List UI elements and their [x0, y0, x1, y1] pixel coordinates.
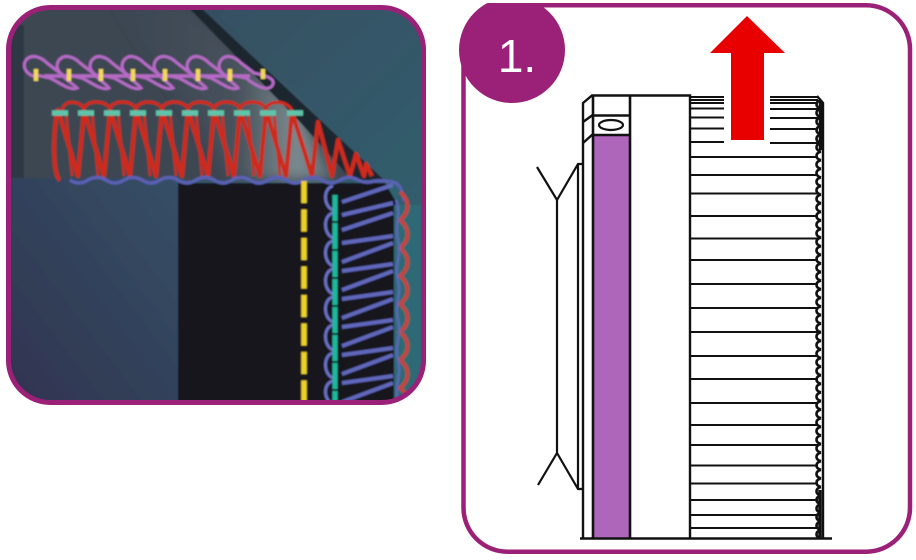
step number badge: 1.: [498, 30, 536, 82]
blue edge line: [396, 200, 399, 404]
red up arrow: [710, 16, 785, 140]
garment outline: [580, 96, 832, 538]
teal needle thread: [332, 195, 338, 404]
purple fabric strip: [593, 135, 630, 538]
panel: stitch close-up: [6, 5, 426, 406]
blue looper scallops: [70, 178, 404, 201]
blue diagonal stitches: [342, 185, 393, 402]
panel: step 1 diagram: [459, 0, 910, 552]
blue loops: [326, 186, 333, 404]
overlock edge: [813, 96, 824, 538]
top right background: [177, 10, 421, 206]
yellow chain dashes: [36, 69, 263, 81]
bottom left fabric: [6, 178, 178, 405]
right strip: [392, 204, 421, 398]
presser guide: [537, 164, 583, 489]
right panel border: [464, 5, 910, 552]
hem fold lines: [690, 97, 818, 528]
step number badge: [459, 0, 565, 103]
yellow dashed seam: [301, 181, 307, 404]
cyan thread dashes: [52, 110, 303, 116]
red zigzag stitches: [54, 102, 372, 180]
fabric flap: [6, 5, 384, 180]
left panel border: [8, 8, 424, 402]
dark fabric: [178, 183, 398, 405]
purple chain stitch: [24, 56, 273, 89]
red edge scallops: [400, 192, 408, 406]
